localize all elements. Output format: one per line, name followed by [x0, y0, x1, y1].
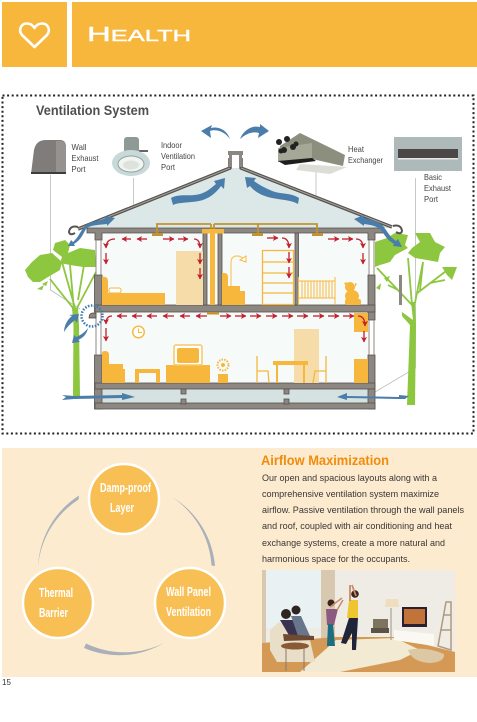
tree: right — [375, 233, 457, 405]
dining table — [273, 361, 308, 383]
arrow: attic left — [171, 178, 225, 205]
heading: Health: H EALTH — [87, 24, 191, 46]
lamp shade — [240, 256, 246, 262]
armchair — [371, 619, 389, 633]
tv stand — [394, 630, 434, 646]
armchair — [222, 273, 245, 305]
arrow: ground right — [337, 393, 409, 400]
vent detail: dashed circle — [82, 306, 102, 326]
crib — [298, 277, 335, 305]
tv — [402, 607, 427, 627]
arrow: vent exhaust — [72, 328, 88, 343]
page number: 15 — [2, 678, 11, 687]
label: wall exhaust port: Exhaust — [72, 153, 99, 163]
panel: airflow maximization background — [2, 448, 477, 677]
rooms — [102, 233, 368, 383]
node: wall panel ventilation: Ventilation — [166, 605, 211, 619]
heading: Ventilation System: Ventilation System — [36, 102, 149, 118]
airflow: blue outdoor arrows — [62, 124, 409, 400]
ceiling ports — [152, 233, 323, 314]
node: damp-proof layer: Damp-proof — [100, 481, 152, 495]
node: thermal barrier — [23, 568, 93, 638]
attic — [80, 168, 390, 228]
body text: and roof, coupled with air conditioning and heat — [262, 521, 452, 532]
ring arc: top left — [38, 496, 79, 567]
cabinet — [354, 359, 368, 383]
icon: heat exchanger — [276, 133, 347, 174]
coffee table — [281, 642, 309, 671]
body text: airflow. Passive ventilation through the wall panels — [262, 505, 464, 516]
node: thermal barrier: Barrier — [39, 606, 68, 620]
floor lamp — [231, 256, 244, 286]
label: heat exchanger: Heat — [348, 144, 365, 154]
photo: family in living room — [262, 570, 455, 672]
label: basic exhaust port: Exhaust — [424, 183, 452, 193]
body text: harmonious space for the occupants. — [262, 554, 410, 565]
sofa — [102, 351, 125, 383]
ring arc: top right — [172, 497, 215, 566]
label: basic exhaust port — [424, 172, 452, 204]
chimney — [228, 151, 243, 167]
node: wall panel ventilation: Wall Panel — [166, 585, 211, 599]
crawl space — [102, 389, 368, 403]
side table — [135, 369, 160, 383]
pillow — [109, 288, 121, 293]
dining chairs — [257, 356, 326, 383]
node: damp-proof layer: Layer — [110, 501, 134, 515]
roof — [69, 158, 402, 234]
body text: comprehensive ventilation system maximize — [262, 489, 439, 500]
shelf — [438, 602, 451, 650]
icon: wall exhaust port — [31, 140, 66, 174]
bookshelf — [262, 250, 294, 304]
label: wall exhaust port: Port — [72, 164, 86, 174]
leader lines — [50, 170, 416, 392]
node: thermal barrier: Thermal — [39, 586, 73, 600]
couple — [280, 606, 314, 641]
label: indoor ventilation port: Ventilation — [161, 151, 195, 161]
body text — [262, 473, 464, 565]
body text: exchange systems, create a more natural and — [262, 538, 445, 549]
airflow: red indoor arrows — [106, 238, 365, 342]
curtains — [262, 570, 335, 643]
node: damp-proof layer — [89, 464, 159, 534]
girl — [326, 598, 343, 646]
label: heat exchanger — [348, 144, 383, 165]
sofa — [270, 622, 315, 662]
balcony floor and wall — [375, 275, 402, 305]
header icon tile — [2, 2, 67, 67]
rug — [300, 638, 420, 672]
label: indoor ventilation port — [161, 140, 195, 172]
icon: indoor ventilation port — [112, 137, 150, 176]
lamp — [385, 599, 399, 640]
window — [265, 570, 321, 628]
ducts — [157, 224, 317, 233]
structure walls and floors — [87, 228, 384, 409]
thin window walls — [96, 240, 374, 355]
teddy bear — [344, 282, 361, 305]
arrow: top right — [240, 124, 269, 139]
arrow: top left — [201, 125, 230, 139]
label: indoor ventilation port: Indoor — [161, 140, 182, 150]
label: wall exhaust port — [72, 142, 99, 174]
bed — [102, 276, 165, 305]
icon: basic exhaust port — [394, 137, 462, 171]
man in yellow — [341, 585, 359, 650]
header bar — [72, 2, 477, 67]
tree: left — [25, 240, 96, 396]
arrow: right eave — [354, 215, 402, 247]
label: indoor ventilation port: Port — [161, 162, 176, 172]
tv — [174, 345, 202, 365]
label: wall exhaust port: Wall — [72, 142, 87, 152]
label: basic exhaust port: Basic — [424, 172, 443, 182]
label: basic exhaust port: Port — [424, 194, 439, 204]
tv cabinet — [166, 365, 210, 383]
label: heat exchanger: Exchanger — [348, 155, 383, 165]
arrow: attic right — [245, 177, 299, 204]
ring arc: bottom — [84, 643, 164, 655]
node: wall panel ventilation — [155, 568, 225, 638]
icon: heart — [20, 24, 49, 47]
furniture — [102, 250, 368, 383]
body text: Our open and spacious layouts along with a — [262, 473, 438, 484]
floor — [262, 637, 455, 672]
house — [69, 151, 402, 409]
wall unit — [354, 313, 368, 332]
duct shaft — [202, 229, 224, 305]
arrow: left eave — [68, 216, 115, 246]
arrow: ground left — [62, 393, 135, 400]
plant — [218, 360, 228, 383]
heading: Airflow Maximization: Airflow Maximization — [261, 452, 389, 468]
panel: ventilation system frame — [2, 96, 474, 434]
door: lower — [294, 329, 319, 383]
clock — [133, 326, 144, 338]
arrow: vent intake — [64, 314, 79, 332]
door: upper — [176, 251, 203, 305]
